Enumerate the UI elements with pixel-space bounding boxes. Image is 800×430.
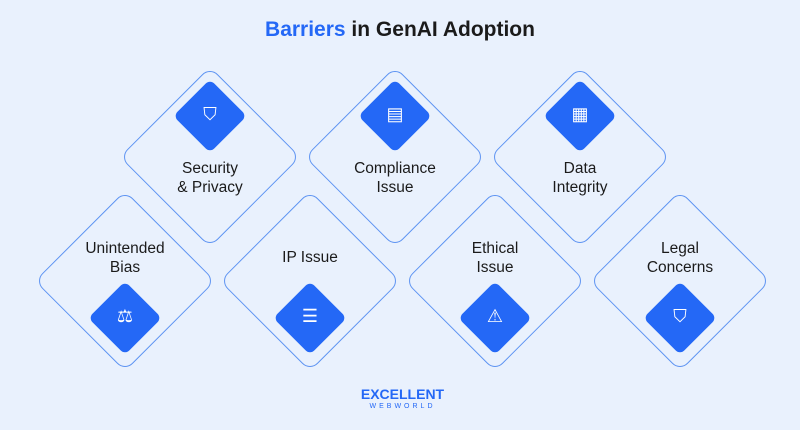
logo bbox=[361, 386, 444, 410]
icon: bias bbox=[88, 281, 162, 355]
text: legal bbox=[647, 240, 713, 276]
panel: legal bbox=[589, 190, 771, 372]
text: bias bbox=[85, 240, 165, 276]
icon: shield bbox=[173, 79, 247, 153]
text: data integrity: Integrity bbox=[552, 179, 608, 196]
icon glyphs: ⛉ bbox=[673, 306, 687, 326]
icon glyphs: ▤ bbox=[386, 104, 404, 124]
text: compliance bbox=[354, 160, 436, 196]
panel: ethical issue bbox=[404, 190, 586, 372]
text: compliance: Issue bbox=[376, 179, 414, 196]
icon glyphs: ⚖ bbox=[117, 306, 133, 326]
text: data integrity bbox=[552, 160, 608, 196]
text: ethical: Issue bbox=[476, 259, 514, 276]
text: security: Security bbox=[182, 160, 238, 177]
panel: ip issue bbox=[219, 190, 401, 372]
text: legal: Legal bbox=[661, 240, 699, 257]
text: bias: Unintended bbox=[85, 240, 165, 257]
icon glyphs: ⚠ bbox=[487, 306, 503, 326]
icon: warning bbox=[458, 281, 532, 355]
icon: ip bbox=[273, 281, 347, 355]
icon glyphs: ⛉ bbox=[203, 104, 217, 124]
text: compliance: Compliance bbox=[354, 160, 436, 177]
icon glyphs: ☰ bbox=[302, 306, 318, 326]
text: bias: Bias bbox=[110, 259, 140, 276]
icon: puzzle bbox=[543, 79, 617, 153]
icon: scales bbox=[643, 281, 717, 355]
panel: data integrity bbox=[489, 66, 671, 248]
logo: EXCELLENT bbox=[361, 386, 444, 402]
text: ethical: Ethical bbox=[472, 240, 518, 257]
text: legal: Concerns bbox=[647, 259, 713, 276]
text: security: & Privacy bbox=[177, 179, 243, 196]
text: ip: IP Issue bbox=[282, 249, 338, 266]
panel: compliance bbox=[304, 66, 486, 248]
title: Barriers in GenAI Adoption bbox=[265, 18, 535, 41]
text: data integrity: Data bbox=[564, 160, 596, 177]
icon: document bbox=[358, 79, 432, 153]
panel: security & privacy bbox=[119, 66, 301, 248]
logo: WEBWORLD bbox=[370, 403, 436, 410]
text: security bbox=[177, 160, 243, 196]
panel: unintended bias bbox=[34, 190, 216, 372]
icon glyphs: ▦ bbox=[571, 104, 588, 124]
text: ethical bbox=[472, 240, 518, 276]
